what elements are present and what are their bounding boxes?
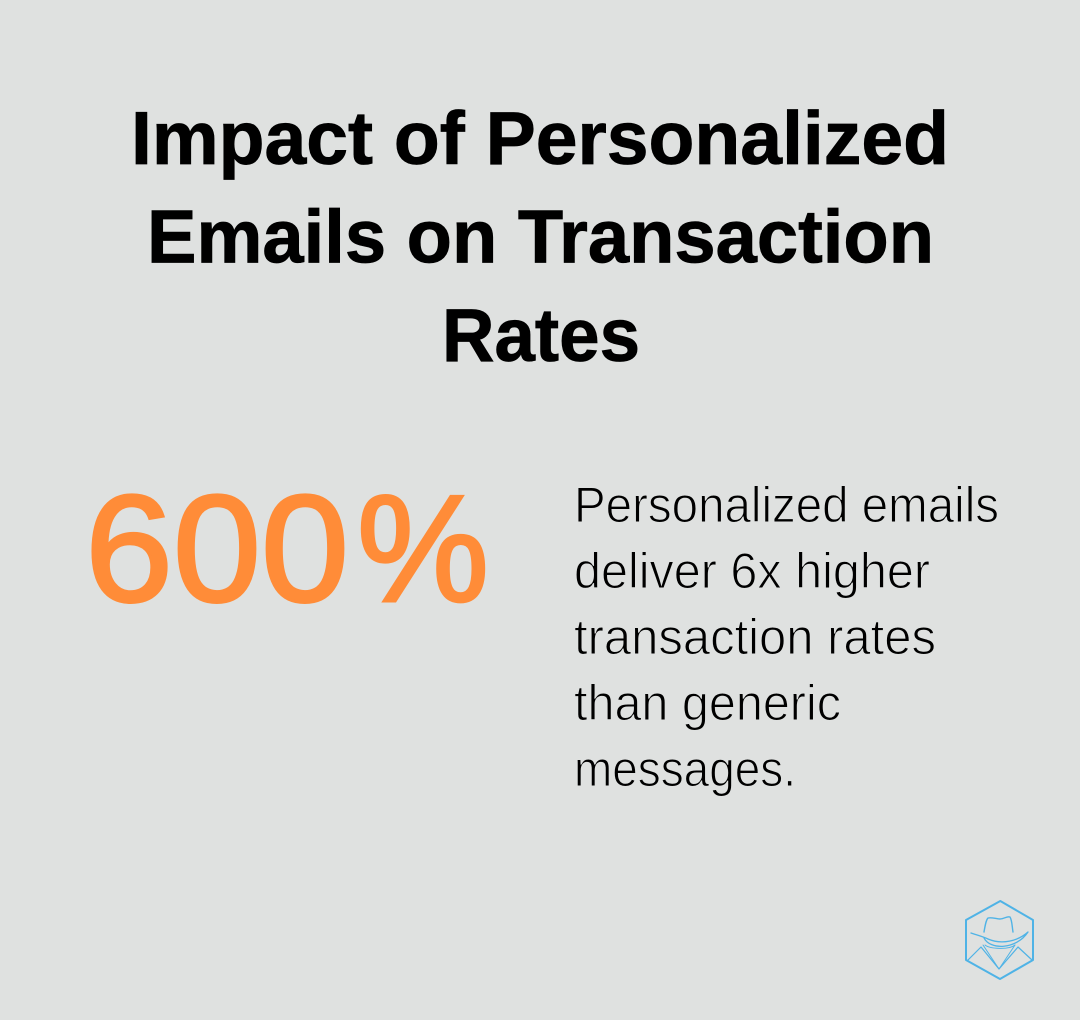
description text: messages. bbox=[574, 741, 796, 797]
description text: transaction rates bbox=[574, 609, 936, 665]
title bbox=[131, 96, 949, 377]
icon: hexagon spy logo bbox=[966, 901, 1033, 979]
big statistic: 600%: % bbox=[357, 464, 489, 634]
description text: deliver 6x higher bbox=[574, 543, 930, 599]
description text: than generic bbox=[574, 675, 841, 731]
title: Emails on Transaction bbox=[147, 194, 934, 278]
description text bbox=[574, 477, 999, 797]
big statistic: 600% bbox=[85, 464, 489, 634]
big statistic: 600%: 600 bbox=[85, 464, 349, 634]
title: Rates bbox=[442, 293, 640, 377]
title: Impact of Personalized bbox=[131, 96, 949, 180]
description text: Personalized emails bbox=[574, 477, 999, 533]
